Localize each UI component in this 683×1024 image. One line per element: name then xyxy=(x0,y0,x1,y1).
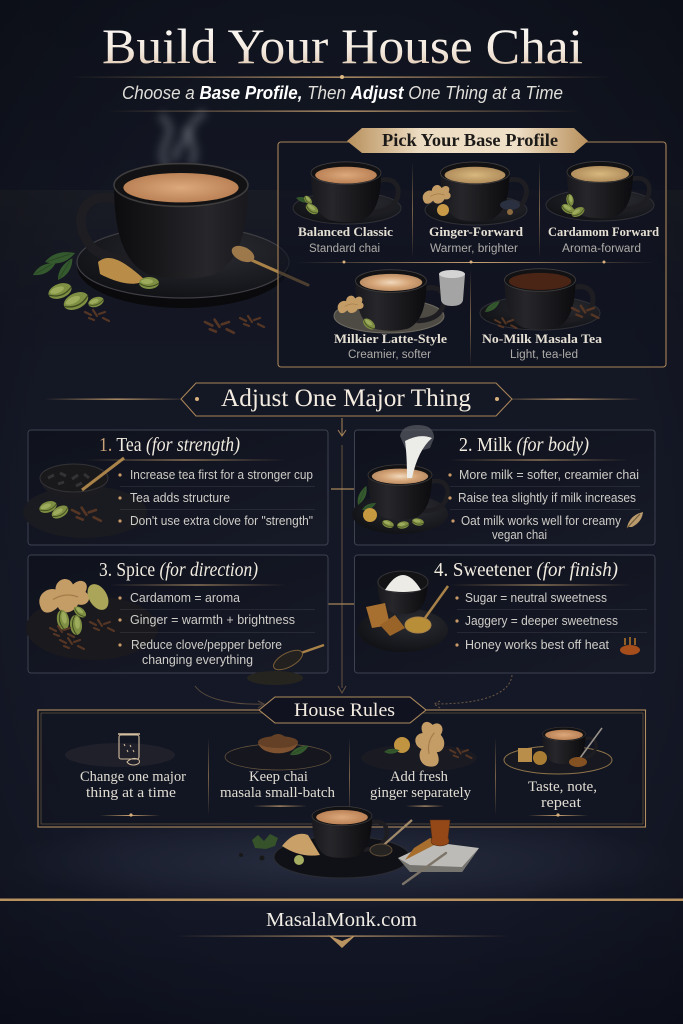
badge: pick your base profile xyxy=(347,128,588,153)
saucer xyxy=(77,224,289,308)
profile: milkier latte-style xyxy=(334,270,465,361)
rule 3: Add fresh xyxy=(390,769,449,785)
bullets xyxy=(455,591,647,652)
bullets: Ginger = warmth + brightness xyxy=(130,613,295,627)
profile: no-milk masala tea: No-Milk Masala Tea xyxy=(482,331,603,346)
bullets: Reduce clove/pepper before xyxy=(131,638,282,652)
bullets: Raise tea slightly if milk increases xyxy=(458,491,636,505)
panel: 2 milk xyxy=(352,425,655,545)
banner: adjust one major thing xyxy=(44,383,641,416)
profile: ginger-forward xyxy=(423,162,527,255)
badge: house rules: House Rules xyxy=(294,700,395,721)
steam xyxy=(160,112,205,168)
profile: ginger-forward: Ginger-Forward xyxy=(429,224,524,239)
panel: 4 sweetener xyxy=(354,555,655,673)
rule 4 xyxy=(504,727,612,817)
icon: fresh ginger xyxy=(361,718,477,772)
bullets xyxy=(448,468,640,542)
illustration: tea bowl xyxy=(23,458,147,538)
heading: 4. Sweetener (for finish) xyxy=(434,559,618,581)
profile: no-milk masala tea xyxy=(480,269,603,361)
profile: no-milk masala tea: Light, tea-led xyxy=(510,349,578,361)
illustration: milk pouring into cup xyxy=(352,425,448,534)
rule 2: masala small-batch xyxy=(220,785,336,801)
title divider xyxy=(70,75,612,79)
badge: pick your base profile: Pick Your Base Profile xyxy=(382,130,558,150)
panel: pick your base profile xyxy=(278,128,666,367)
panel: 1 tea xyxy=(23,430,328,545)
rule 4: Taste, note, xyxy=(528,779,597,795)
bullets xyxy=(118,591,315,667)
bullets: Oat milk works well for creamy xyxy=(461,514,622,528)
icon: honey xyxy=(620,637,640,655)
heading: 3. Spice (for direction) xyxy=(99,559,258,581)
profile: milkier latte-style: Creamier, softer xyxy=(348,349,431,361)
rule 1: thing at a time xyxy=(86,785,176,801)
profile: ginger-forward: Warmer, brighter xyxy=(430,243,518,255)
profile: balanced classic: Balanced Classic xyxy=(298,224,393,239)
rule 2 xyxy=(220,734,336,807)
rule 3: ginger separately xyxy=(370,785,472,801)
bullets: Cardamom = aroma xyxy=(130,591,240,605)
badge: house rules xyxy=(259,697,426,723)
cup xyxy=(81,164,248,279)
icon: oat leaf xyxy=(627,512,643,528)
rule 2: Keep chai xyxy=(249,769,308,785)
panel: 3 spice xyxy=(26,555,328,685)
profile: cardamom forward: Cardamom Forward xyxy=(548,224,660,239)
bullets: More milk = softer, creamier chai xyxy=(459,468,639,482)
panel: house rules xyxy=(38,697,646,827)
bullets: vegan chai xyxy=(492,528,547,542)
illustration: tea spoon xyxy=(247,645,324,685)
flow arrows xyxy=(195,418,512,708)
bullets: changing everything xyxy=(142,653,253,667)
hero cup illustration xyxy=(31,112,308,333)
illustration: sugar and jaggery xyxy=(358,571,448,652)
heading: 2. Milk (for body) xyxy=(459,434,589,456)
profile: cardamom forward: Aroma-forward xyxy=(562,243,641,255)
title: Build Your House Chai xyxy=(102,18,583,74)
bullets: Honey works best off heat xyxy=(465,638,610,652)
banner: adjust one major thing: Adjust One Major Thing xyxy=(221,385,472,412)
bullets: Tea adds structure xyxy=(130,491,230,505)
rule 1: Change one major xyxy=(80,769,186,785)
heading: 1. Tea (for strength) xyxy=(99,434,240,456)
footer band xyxy=(0,898,683,901)
footer website: MasalaMonk.com xyxy=(266,909,417,931)
herbs and spices xyxy=(31,260,58,278)
bullets xyxy=(118,468,315,528)
illustration: bottom cup and notebook xyxy=(239,806,479,884)
icon: cup and spoon xyxy=(504,727,612,774)
icon: masala bowl xyxy=(225,734,331,770)
rule 4: repeat xyxy=(541,795,581,811)
bullets: Increase tea first for a stronger cup xyxy=(130,468,313,482)
bullets: Jaggery = deeper sweetness xyxy=(465,614,618,628)
profile: milkier latte-style: Milkier Latte-Style xyxy=(334,331,447,346)
profile: balanced classic: Standard chai xyxy=(309,243,380,255)
rule 3 xyxy=(361,718,477,807)
subtitle: Choose a Base Profile, Then Adjust One Thing at a Time xyxy=(122,83,563,103)
illustration: spice plate xyxy=(26,579,158,660)
icon: jar and note xyxy=(65,734,175,767)
spoon xyxy=(240,255,308,285)
footer ornament xyxy=(176,935,510,948)
ginger xyxy=(98,258,145,284)
rule 1 xyxy=(65,734,186,817)
profile: cardamom forward xyxy=(546,161,660,255)
profile: balanced classic xyxy=(293,162,401,255)
bullets: Sugar = neutral sweetness xyxy=(465,591,607,605)
bullets: Don't use extra clove for "strength" xyxy=(130,514,313,528)
